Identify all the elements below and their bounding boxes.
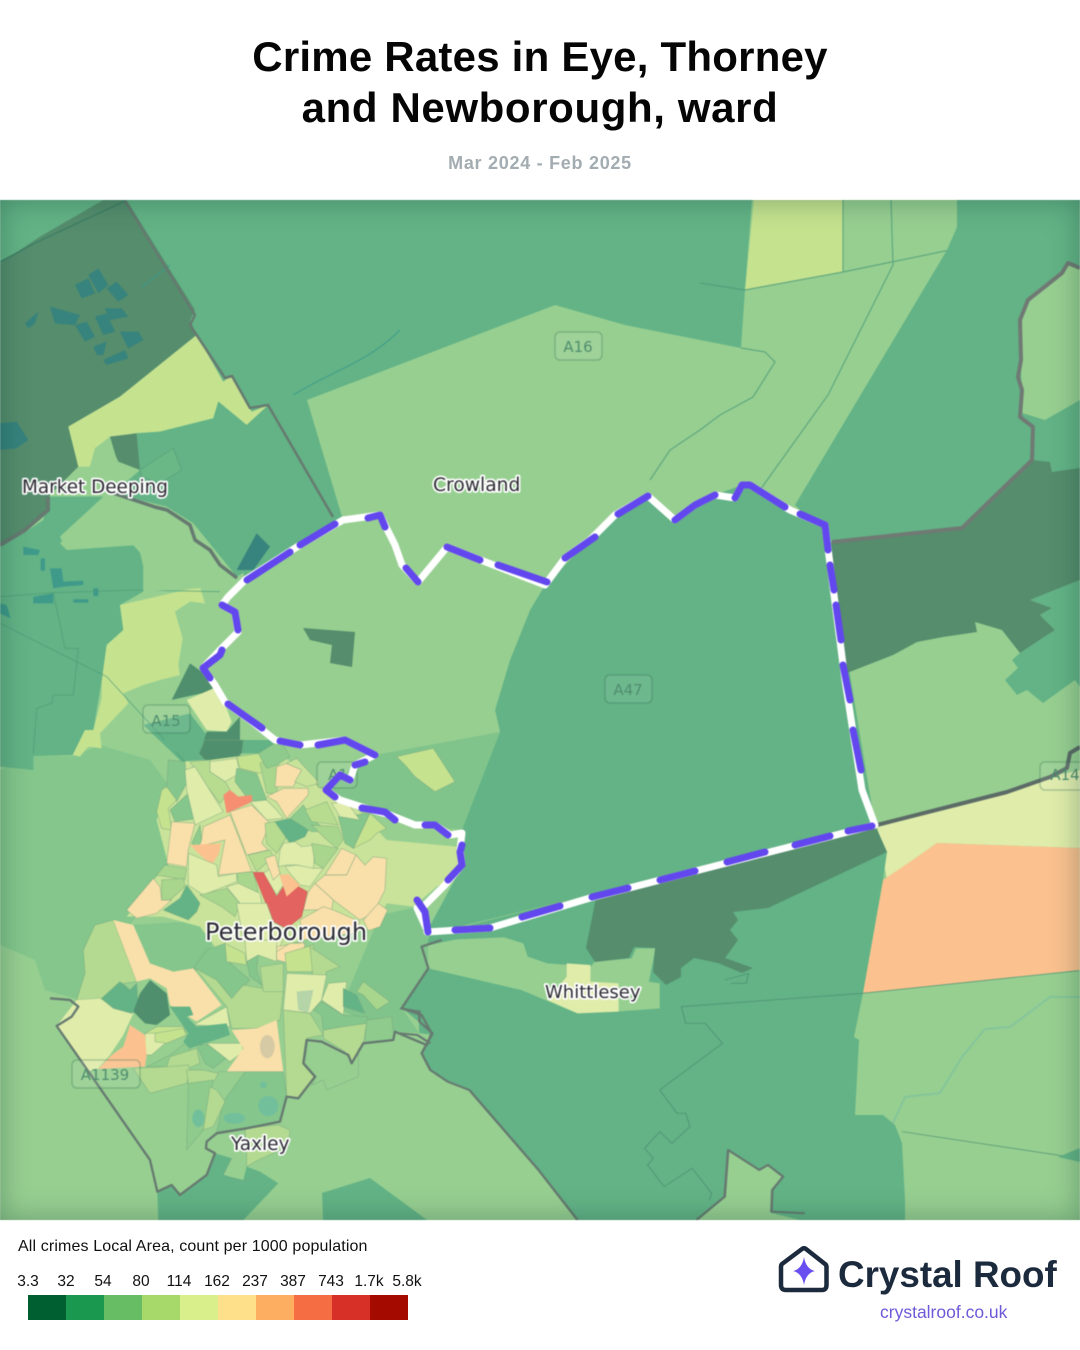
logo url: crystalroof.co.uk [880, 1302, 1007, 1322]
map [0, 199, 1080, 1221]
east ward green area [425, 485, 875, 935]
area under light patch [1022, 400, 1080, 472]
legend values: 114 [167, 1273, 192, 1290]
river on east [893, 997, 1080, 1123]
west-of-city base [0, 745, 215, 1000]
south-central green wedge [322, 1178, 427, 1220]
legend values: 32 [57, 1273, 75, 1290]
strip between ward line and city [326, 732, 500, 830]
place labels [22, 475, 641, 1155]
road labels: A1139 [81, 1066, 129, 1084]
road labels: A47 [613, 681, 643, 699]
dark ward patch [303, 628, 355, 667]
legend values: 5.8k [392, 1273, 422, 1290]
legend values: 743 [318, 1273, 344, 1290]
green block east of Market Deeping [113, 402, 333, 577]
north-east green area [795, 200, 1080, 542]
orange south-east field [863, 843, 1080, 993]
map edge vignette [0, 200, 1080, 1220]
red central wards [253, 872, 307, 928]
yellow strip near Market Deeping [68, 335, 268, 467]
place labels: Peterborough [205, 918, 367, 946]
title: and Newborough, ward [302, 84, 778, 131]
subtitle: date range: Mar 2024 - Feb 2025 [448, 153, 632, 173]
logo: Crystal Roof [778, 1246, 1057, 1322]
place labels: Yaxley [230, 1134, 290, 1155]
green patch east [1005, 580, 1080, 703]
Whittlesey strip [422, 937, 660, 1013]
district borders [0, 201, 1080, 1220]
light patch near Market Deeping [60, 497, 240, 592]
road labels [72, 332, 1080, 1088]
road labels: A14 [1050, 766, 1080, 784]
pale yellow south-east field [877, 770, 1080, 880]
legend values: 162 [204, 1273, 230, 1290]
industrial blocks [0, 268, 270, 570]
legend values: 3.3 [17, 1273, 39, 1290]
road labels: A1 [328, 766, 348, 784]
green patch below Yaxley [157, 1153, 278, 1220]
south green area [402, 825, 905, 1220]
left ward light area [205, 515, 545, 755]
north green area [0, 200, 752, 580]
icon: house with star [778, 1246, 829, 1292]
place labels: Crowland [433, 475, 520, 496]
logo wordmark: Crystal Roof [838, 1254, 1057, 1295]
place labels: Whittlesey [545, 982, 641, 1003]
road labels: A15 [151, 712, 181, 730]
legend values: 387 [280, 1273, 306, 1290]
title: Crime Rates in Eye, Thorney [252, 33, 828, 80]
west green area with A15 patches [0, 497, 240, 778]
road labels: A16 [563, 338, 593, 356]
dark south band [586, 825, 887, 985]
Peterborough city north neighbourhoods [127, 740, 460, 960]
Peterborough city south neighbourhoods [57, 920, 393, 1220]
top field lines [650, 200, 950, 490]
north-west dark block and Market Deeping fields [0, 200, 400, 667]
place labels: Market Deeping [22, 477, 168, 498]
ward boundary: white base line [203, 485, 875, 932]
dark east block [830, 460, 1080, 673]
legend values: 80 [132, 1273, 150, 1290]
yellow-green base [127, 753, 460, 957]
legend values: 237 [242, 1273, 268, 1290]
legend values: 54 [94, 1273, 112, 1290]
south thin boundaries [645, 971, 1079, 1200]
legend [17, 1238, 422, 1320]
legend values [17, 1273, 422, 1290]
legend colour scale [28, 1295, 408, 1320]
legend title: All crimes Local Area, count per 1000 population [18, 1238, 368, 1255]
ward boundary: purple dashes [203, 485, 872, 932]
yellow field top [745, 200, 843, 290]
legend values: 1.7k [354, 1273, 384, 1290]
title [252, 33, 828, 131]
